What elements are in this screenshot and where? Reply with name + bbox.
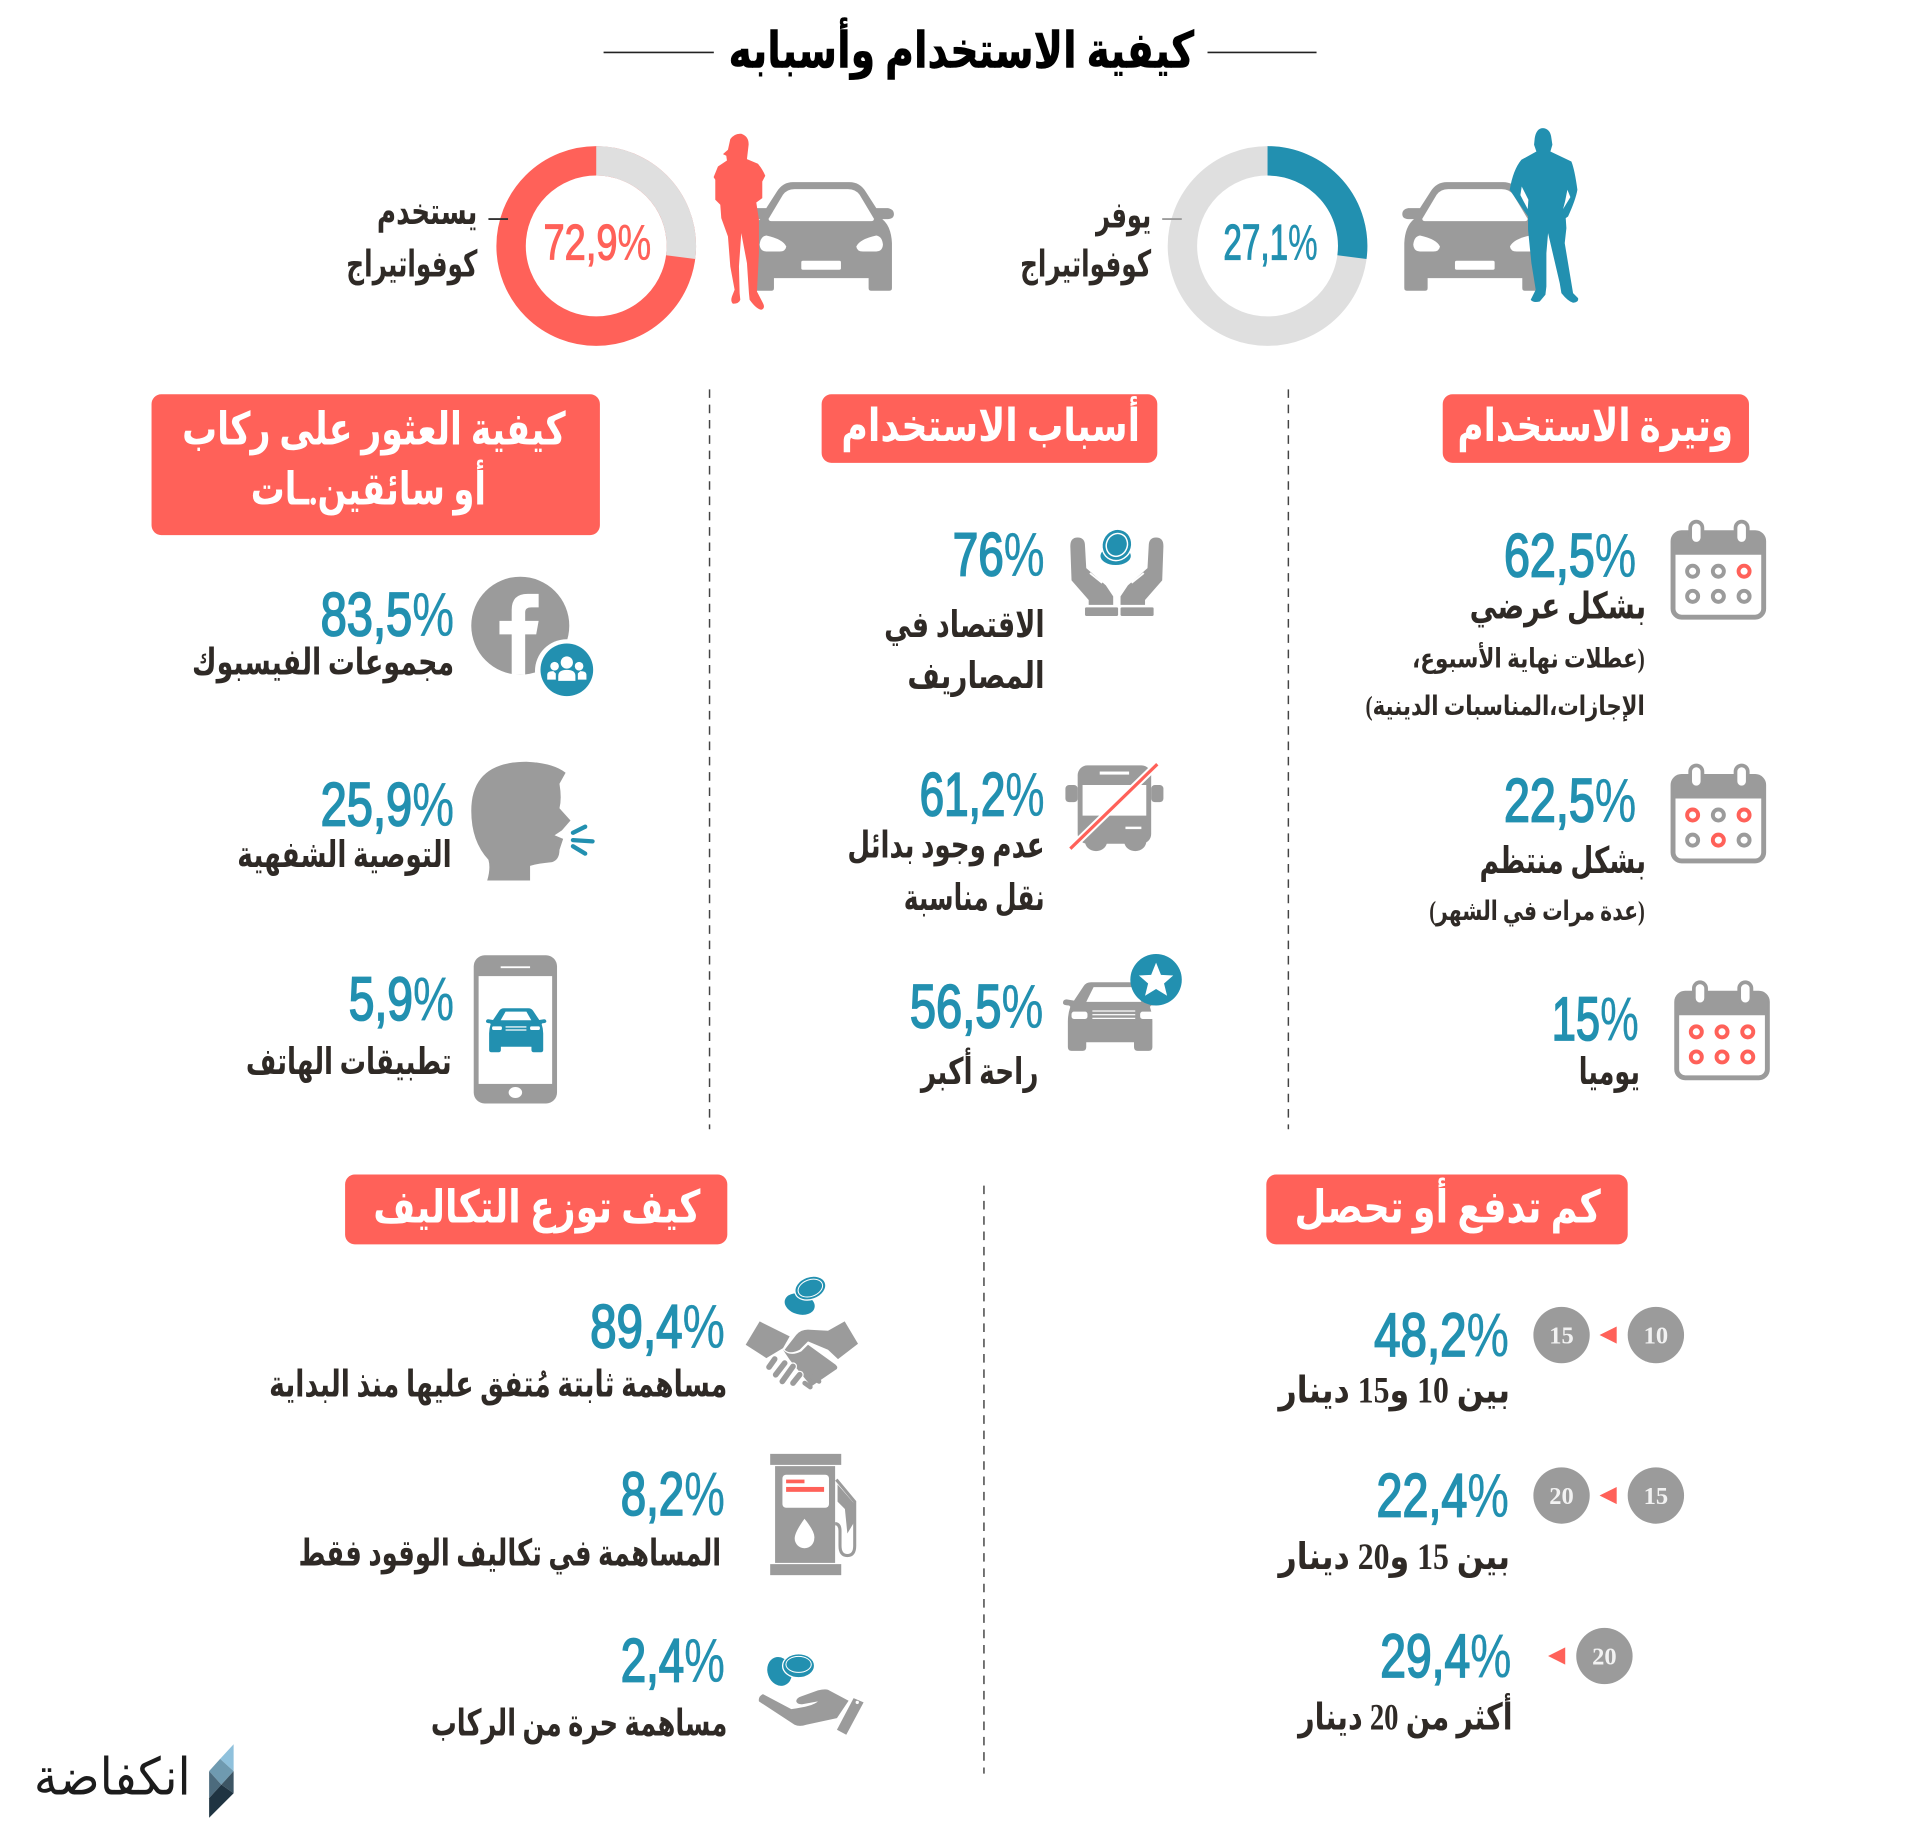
label: offers covoiturage: كوفواتيراج [1020, 244, 1152, 286]
item: more than 20: أكثر من 20 دينار [1297, 1693, 1513, 1739]
item: fuel costs only: المساهمة في تكاليف الوقود فقط [299, 1532, 721, 1574]
item: phone apps [246, 955, 557, 1104]
item: daily [1552, 982, 1767, 1093]
item: occasional: 62,5% [1504, 522, 1636, 590]
item: between 10 and 15: 48,2% [1374, 1301, 1509, 1369]
panel: finding passengers or drivers [152, 394, 600, 1104]
panel: passengers share [346, 134, 894, 331]
item: saving expenses: المصاريف [907, 655, 1045, 697]
heading: أو سائقين.ـات [251, 459, 486, 515]
panel: how much you pay or earn [1266, 1175, 1684, 1739]
item: regular: 22,5% [1504, 767, 1636, 835]
item: more than 20 [1297, 1622, 1633, 1739]
item: facebook groups: 83,5% [321, 581, 454, 649]
item: more than 20: 20 [1592, 1644, 1617, 1671]
donut chart: 27.1%: 27,1% [1223, 214, 1318, 270]
heading [152, 394, 600, 535]
heading: كيف توزع التكاليف [373, 1182, 701, 1233]
divider lines [710, 389, 1288, 1774]
item: more than 20: 29,4% [1380, 1622, 1511, 1690]
item: more comfort [910, 954, 1182, 1093]
item: no transport alternatives: عدم وجود بدائل [847, 824, 1045, 867]
label: offers covoiturage: يوفر [1095, 195, 1151, 237]
item: occasional: الإجازات،المناسبات الدينية) [1366, 691, 1645, 722]
item: word of mouth: التوصية الشفهية [237, 834, 452, 876]
item: fuel costs only: 8,2% [621, 1460, 725, 1528]
item: free contribution: مساهمة حرة من الركاب [431, 1703, 727, 1745]
item: no transport alternatives: نقل مناسبة [904, 877, 1045, 918]
item: free contribution: 2,4% [621, 1627, 725, 1695]
item: more comfort: 56,5% [910, 973, 1043, 1041]
item: between 10 and 15: 10 [1644, 1323, 1668, 1350]
panel: reasons for use [822, 394, 1182, 1093]
item: daily: 15% [1552, 985, 1639, 1053]
heading: أسباب الاستخدام [841, 396, 1140, 452]
item: regular: بشكل منتظم [1479, 840, 1646, 882]
heading [822, 394, 1157, 463]
item: phone apps: 5,9% [349, 965, 454, 1033]
item: free contribution [431, 1627, 864, 1745]
item: saving expenses [884, 521, 1163, 697]
item: facebook groups: مجموعات الفيسبوك [192, 642, 454, 684]
heading: كم تدفع أو تحصل [1294, 1177, 1601, 1233]
item: between 10 and 15: بين 10 و15 دينار [1277, 1369, 1510, 1411]
item: phone apps: تطبيقات الهاتف [246, 1041, 452, 1083]
panel: frequency of use [1366, 394, 1767, 1093]
heading: كيفية العثور على ركاب [182, 404, 566, 455]
title: كيفية الاستخدام وأسبابه [729, 18, 1195, 81]
item: occasional: (عطلات نهاية الأسبوع، [1412, 641, 1645, 674]
item: word of mouth [237, 762, 593, 881]
heading [345, 1175, 727, 1244]
label: offers covoiturage [1020, 195, 1182, 286]
item: between 15 and 20: 20 [1549, 1483, 1574, 1510]
item: between 10 and 15: 15 [1549, 1323, 1574, 1350]
item: fuel costs only [299, 1454, 855, 1575]
heading: وتيرة الاستخدام [1457, 401, 1733, 452]
item: no transport alternatives: 61,2% [920, 761, 1045, 829]
item: word of mouth: 25,9% [321, 770, 454, 838]
item: fixed contribution: 89,4% [590, 1292, 725, 1360]
icon: woman silhouette [714, 134, 765, 310]
panel: how costs are shared [269, 1175, 864, 1745]
donut chart: 72.9% [511, 161, 681, 331]
label: uses covoiturage: يستخدم [377, 191, 477, 234]
item: saving expenses: 76% [953, 521, 1045, 589]
donut chart: 72.9%: 72,9% [544, 214, 651, 270]
item: fixed contribution [269, 1272, 858, 1405]
icon: man silhouette [1510, 128, 1578, 303]
item: occasional [1366, 522, 1764, 722]
item: between 15 and 20: 22,4% [1377, 1461, 1509, 1529]
logo: Inkyfada: انكفاضة [34, 1747, 191, 1807]
item: between 15 and 20: 15 [1644, 1483, 1668, 1510]
item: between 15 and 20 [1277, 1461, 1684, 1578]
item: regular [1429, 765, 1764, 927]
donut chart: 27.1% [1182, 161, 1353, 331]
panel: drivers share [1020, 128, 1578, 331]
item: between 10 and 15 [1277, 1301, 1684, 1411]
item: between 15 and 20: بين 15 و20 دينار [1277, 1536, 1510, 1578]
icon: car [1402, 182, 1548, 291]
heading [1443, 394, 1749, 463]
item: occasional: بشكل عرضي [1470, 585, 1646, 627]
item: regular: (عدة مرات في الشهر) [1429, 896, 1645, 927]
item: no transport alternatives [847, 761, 1163, 918]
item: saving expenses: الاقتصاد في [884, 604, 1045, 646]
icon: car [749, 182, 894, 291]
logo: Inkyfada [34, 1744, 234, 1818]
item: facebook groups [192, 577, 599, 703]
label: uses covoiturage [346, 191, 508, 286]
item: more comfort: راحة أكبر [919, 1047, 1038, 1093]
item: fixed contribution: مساهمة ثابتة مُتفق عليها منذ البداية [269, 1363, 727, 1405]
label: uses covoiturage: كوفواتيراج [346, 244, 478, 286]
item: daily: يوميا [1579, 1051, 1640, 1093]
heading [1266, 1175, 1628, 1244]
